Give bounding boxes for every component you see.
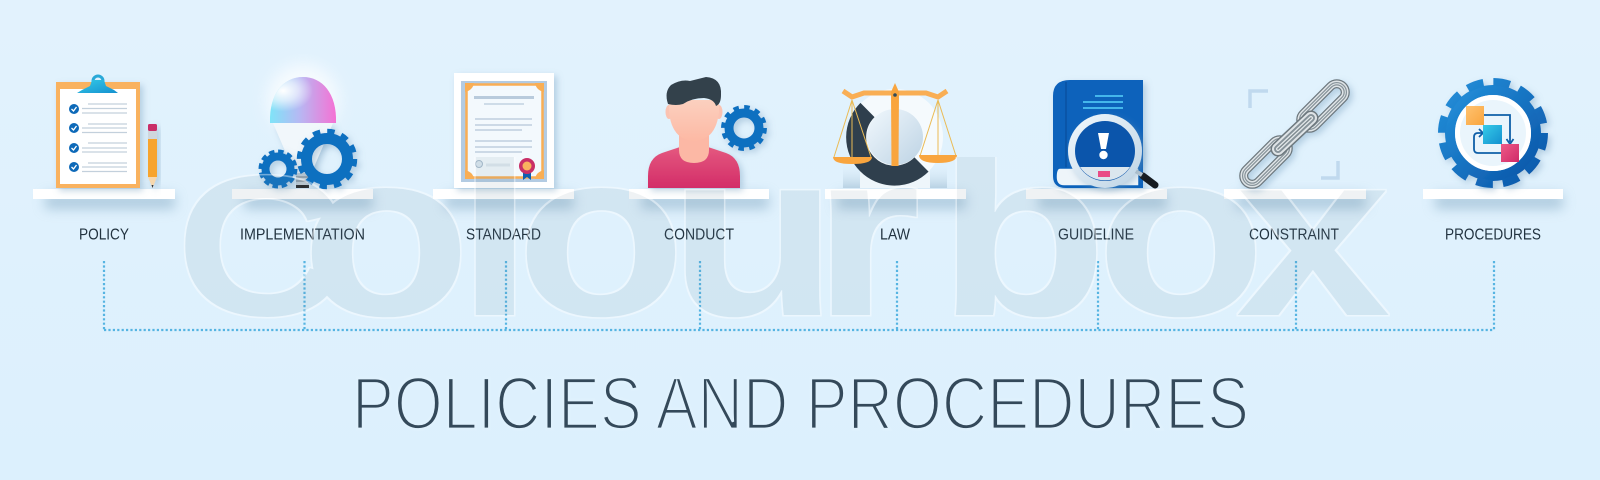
watermark: Colourbox: o — [516, 101, 686, 365]
shelf: procedures — [1423, 189, 1563, 209]
shelf: guideline — [1026, 189, 1167, 209]
seal — [519, 158, 535, 180]
gear: large — [300, 132, 354, 186]
shelf: law — [825, 189, 966, 209]
icon: certificate — [454, 73, 554, 188]
shelf: implementation — [232, 189, 373, 209]
watermark: Colourbox: b — [938, 101, 1108, 365]
label: IMPLEMENTATION: IMPLEMENTATION — [240, 226, 365, 244]
label: CONDUCT: CONDUCT — [664, 226, 734, 244]
label: GUIDELINE: GUIDELINE — [1058, 226, 1134, 244]
watermark: Colourbox: u — [668, 101, 839, 365]
title: POLICIES AND PROCEDURES — [352, 362, 1249, 445]
shelf: constraint — [1224, 189, 1366, 209]
icon: pencil — [148, 124, 157, 188]
icon: person — [648, 77, 765, 188]
gear: small — [260, 152, 296, 186]
label: POLICY: POLICY — [79, 226, 129, 244]
watermark: Colourbox: x — [1236, 101, 1392, 365]
label: LAW: LAW — [880, 226, 910, 244]
watermark: Colourbox: o — [1096, 101, 1266, 365]
shelf: policy — [33, 189, 175, 209]
watermark: Colourbox: C — [176, 135, 346, 358]
label: PROCEDURES: PROCEDURES — [1445, 226, 1541, 244]
infographic: policies and procedures — [33, 60, 1568, 428]
dotted connector bracket — [104, 261, 1494, 330]
icon: procedures gear with flow — [1442, 82, 1544, 184]
watermark: Colourbox: l — [456, 101, 534, 365]
shelf: conduct — [629, 189, 769, 209]
magnifier — [1068, 114, 1155, 188]
label: STANDARD: STANDARD — [466, 226, 541, 244]
watermark: Colourbox: r — [812, 101, 921, 365]
icon: smart bulb with gears — [260, 64, 354, 188]
watermark: Colourbox: o — [301, 101, 471, 365]
icon: chain with focus brackets — [1240, 80, 1349, 188]
shelf: standard — [433, 189, 574, 209]
icon: scales of justice — [833, 83, 957, 188]
icon: clipboard with checklist — [56, 76, 140, 188]
icon: guideline book with magnifier — [1053, 80, 1155, 188]
gear — [723, 107, 765, 149]
label: CONSTRAINT: CONSTRAINT — [1249, 226, 1339, 244]
